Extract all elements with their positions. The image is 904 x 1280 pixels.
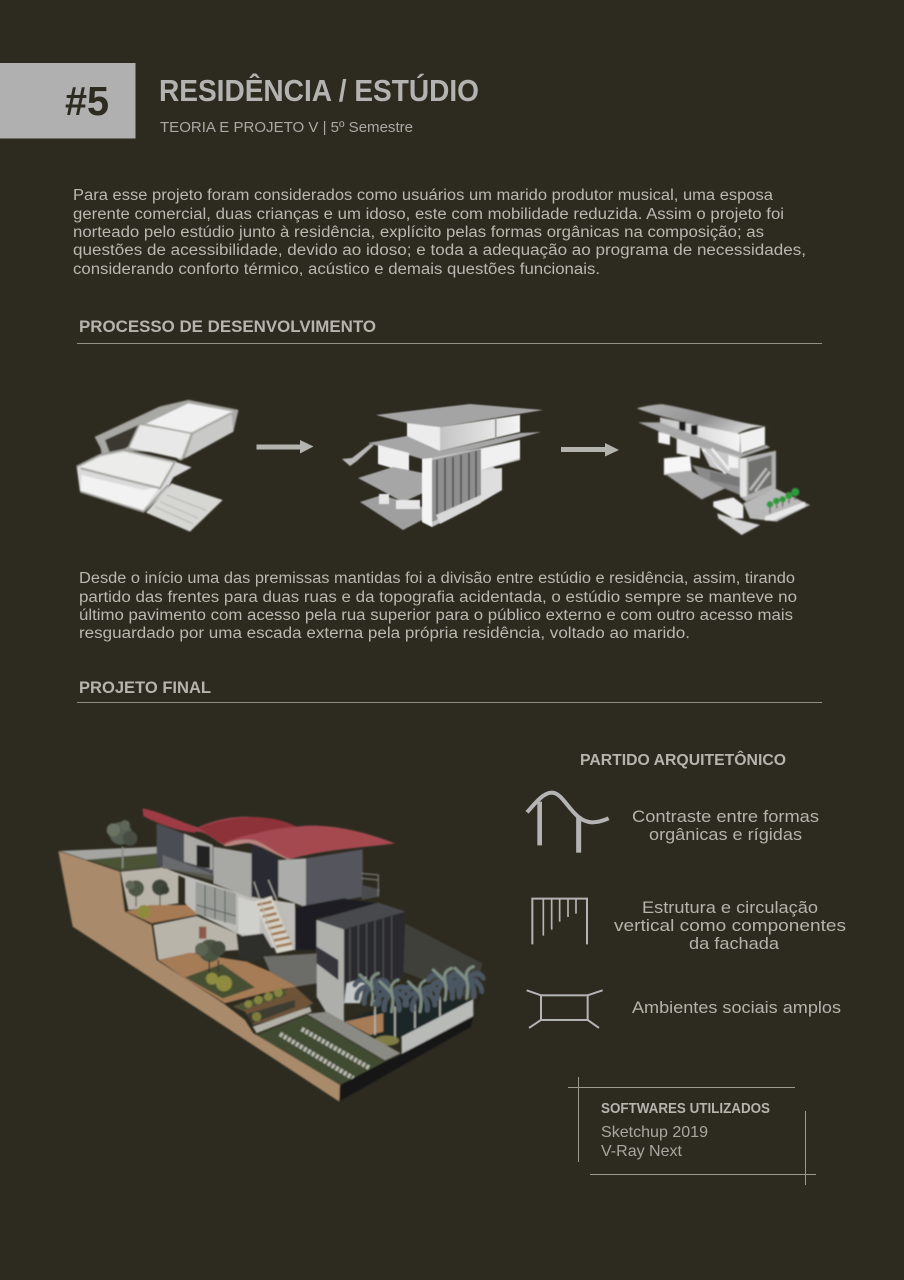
back garden floor <box>344 998 473 1038</box>
terrace floor <box>158 953 297 1003</box>
top left tree <box>107 820 137 868</box>
text: structure and circulation: Estrutura e circulação <box>642 898 818 917</box>
software box: Sketchup 2019 <box>601 1124 708 1141</box>
arrow 1 <box>256 440 314 454</box>
number badge: #5 <box>65 78 109 124</box>
intro paragraph: Para esse projeto foram considerados como usuários um marido produtor musical, uma esposa <box>73 187 773 204</box>
heading: projeto final: PROJETO FINAL <box>79 678 211 697</box>
software box: V-Ray Next <box>601 1143 683 1160</box>
lower dark glazing <box>238 933 277 962</box>
upper right volume <box>278 858 306 907</box>
terrace tree and shrubs <box>195 939 232 991</box>
text: social spaces: Ambientes sociais amplos <box>632 998 841 1017</box>
intro paragraph: norteado pelo estúdio junto à residência, explícito pelas formas orgânicas na composição; as <box>73 224 764 241</box>
palm trees <box>355 967 483 1043</box>
intro paragraph: gerente comercial, duas crianças e um idoso, este com mobilidade reduzida. Assim o projeto foi <box>73 206 784 223</box>
heading: processo de desenvolvimento: PROCESSO DE DESENVOLVIMENTO <box>79 317 376 336</box>
house middle white block <box>163 868 295 950</box>
text: structure and circulation <box>614 898 846 953</box>
top street and lawn <box>60 847 160 871</box>
upper centre volume <box>213 847 252 898</box>
upper left dark volume <box>157 823 213 875</box>
process description paragraph: resguardado por uma escada externa pela própria residência, voltado ao marido. <box>79 625 690 642</box>
text: structure and circulation: da fachada <box>689 934 780 953</box>
intro paragraph <box>73 187 806 278</box>
number badge <box>0 63 136 138</box>
process step 3: detailed section model <box>637 404 810 535</box>
subtitle: TEORIA E PROJETO V | 5º Semestre <box>160 119 413 136</box>
exterior stairs <box>254 880 295 953</box>
software box: SOFTWARES UTILIZADOS <box>601 1101 770 1117</box>
heading: partido arquitetônico: PARTIDO ARQUITETÔNICO <box>580 750 786 769</box>
white boundary wall <box>402 999 473 1054</box>
intro paragraph: considerando conforto térmico, acústico e demais questões funcionais. <box>73 261 600 278</box>
intro paragraph: questões de acessibilidade, devido ao idoso; e toda a adequação ao programa de necessidades, <box>73 242 806 259</box>
driveway <box>257 1012 401 1085</box>
roof <box>143 808 395 859</box>
right concrete tower <box>317 903 482 1022</box>
final project 3D section render <box>58 808 483 1102</box>
shrubs by wall <box>374 1036 399 1046</box>
process step 1: physical model <box>77 401 238 532</box>
text: contrast of forms: orgânicas e rígidas <box>649 825 802 844</box>
process description paragraph: partido das frentes para duas ruas e da topografia acidentada, o estúdio sempre se manteve no <box>79 589 797 606</box>
title: RESIDÊNCIA / ESTÚDIO <box>159 72 479 108</box>
upper garden niche <box>121 867 197 923</box>
terrain side cut <box>58 851 340 1102</box>
icon: organic curve on two columns <box>527 793 609 853</box>
process step 2: white section model <box>342 404 543 530</box>
process description paragraph <box>79 570 797 642</box>
software box <box>568 1077 816 1185</box>
icon: wide social space <box>527 990 603 1028</box>
icon: structure frame <box>532 899 587 944</box>
planters and steps <box>233 987 313 1033</box>
text: structure and circulation: vertical como componentes <box>614 916 846 935</box>
text: contrast of forms <box>632 807 819 844</box>
process description paragraph: último pavimento com acesso pela rua superior para o público externo e com outro acesso mais <box>79 607 793 624</box>
terrace lawn <box>185 964 255 998</box>
arrow 2 <box>561 443 619 456</box>
dark front cut face <box>339 990 482 1102</box>
text: contrast of forms: Contraste entre formas <box>632 807 819 826</box>
process description paragraph: Desde o início uma das premissas mantidas foi a divisão entre estúdio e residência, assim, tirando <box>79 570 795 587</box>
lower retaining wall <box>153 916 238 960</box>
